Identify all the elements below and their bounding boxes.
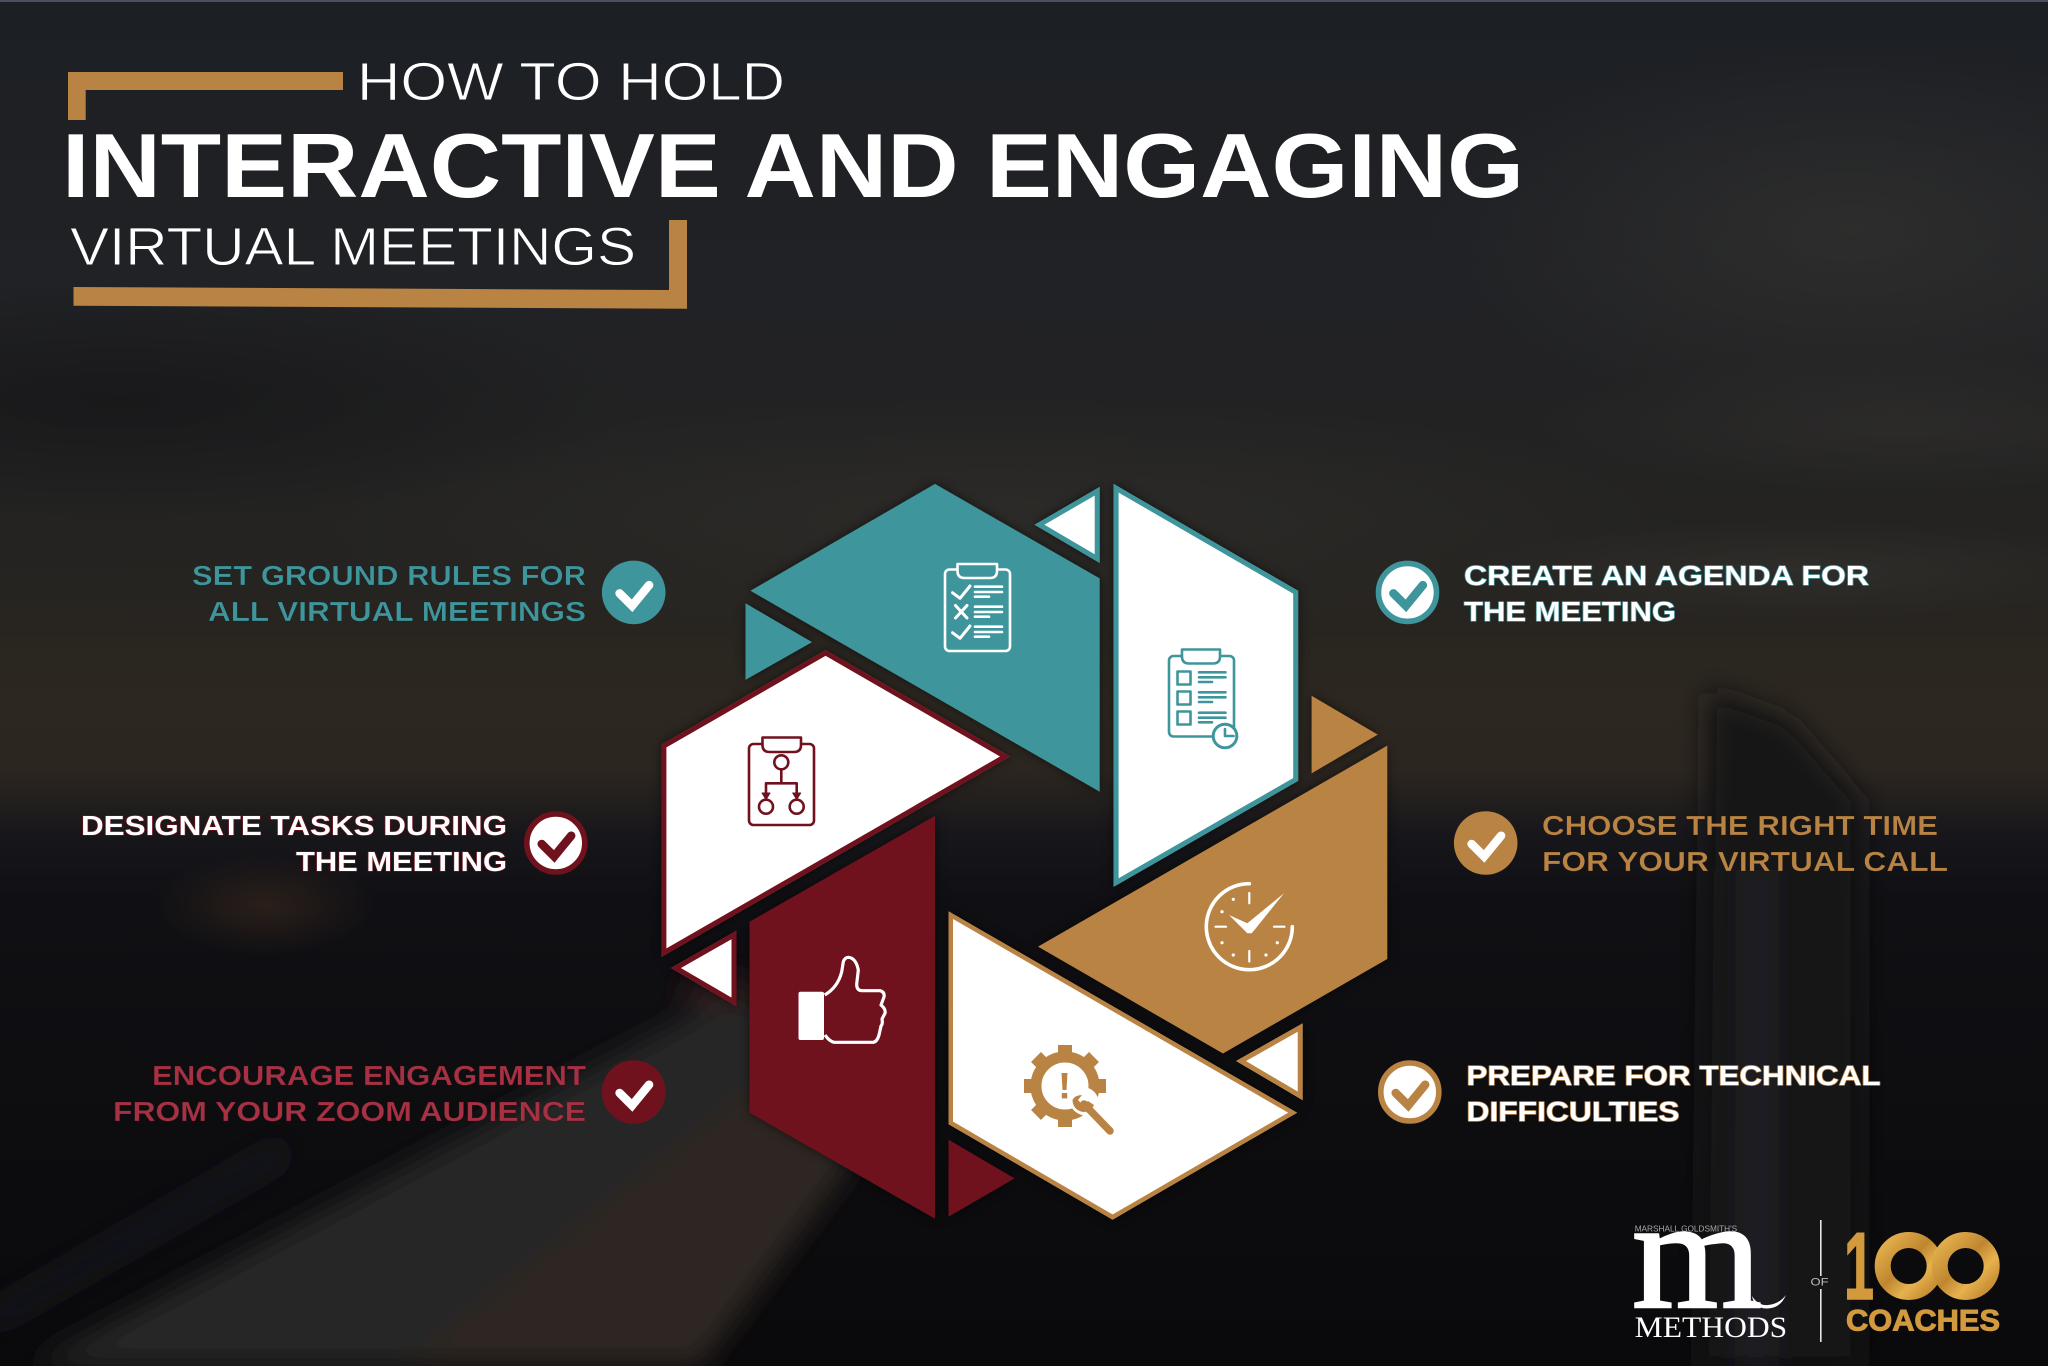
- segment: white create an agenda: [1114, 484, 1298, 887]
- icon: gear and wrench: [1024, 1045, 1110, 1131]
- label text: CREATE AN AGENDA FOR: [1464, 560, 1869, 591]
- check badge: [602, 561, 666, 624]
- label text: DIFFICULTIES: [1466, 1096, 1680, 1127]
- label text: FROM YOUR ZOOM AUDIENCE: [113, 1096, 586, 1127]
- segment: dark red encourage engagement: [671, 816, 1015, 1219]
- label text: THE MEETING: [1464, 596, 1676, 627]
- top edge strip: [0, 0, 2048, 2]
- label text: [81, 810, 507, 877]
- item: choose the right time: [1454, 810, 1948, 877]
- logo: m methods: METHODS: [1635, 1311, 1787, 1344]
- logo: 100 coaches: COACHES: [1846, 1304, 2000, 1338]
- logo divider and of: OF: [1810, 1276, 1829, 1288]
- logo: 100 coaches: 1: [1844, 1213, 1874, 1320]
- item: designate tasks: [81, 810, 585, 877]
- label text: [1466, 1060, 1880, 1127]
- item: set ground rules: [192, 560, 666, 627]
- check badge: [1454, 811, 1517, 875]
- top gold bracket: [68, 72, 343, 120]
- label text: THE MEETING: [296, 846, 507, 877]
- item: encourage engagement: [113, 1060, 666, 1127]
- logo: 100 coaches: [1844, 1213, 2000, 1338]
- icon: checklist clipboard: [945, 564, 1010, 651]
- logo: Marshall Goldsmith's M Methods of 100 Coaches: [1632, 1167, 2000, 1344]
- title block: [62, 52, 1524, 309]
- segment: white prepare for technical difficulties: [948, 911, 1297, 1220]
- logo: m methods: MARSHALL GOLDSMITH'S: [1635, 1224, 1738, 1234]
- item: prepare for technical difficulties: [1381, 1060, 1880, 1127]
- check badge: [527, 814, 585, 872]
- hexagon diagram: [661, 484, 1387, 1220]
- icon: flowchart clipboard: [749, 738, 814, 825]
- icon: clock with check: [1206, 884, 1292, 970]
- label text: [192, 560, 586, 627]
- logo divider and of: [1810, 1220, 1829, 1342]
- title line: virtual meetings: VIRTUAL MEETINGS: [70, 217, 636, 277]
- check badge: [602, 1060, 666, 1124]
- segment: teal set ground rules: [746, 484, 1100, 792]
- label text: FOR YOUR VIRTUAL CALL: [1542, 846, 1948, 877]
- label text: CHOOSE THE RIGHT TIME: [1542, 810, 1938, 841]
- check badge: [1378, 563, 1436, 621]
- icon: agenda clipboard with clock: [1169, 650, 1237, 748]
- label text: ALL VIRTUAL MEETINGS: [208, 596, 586, 627]
- title line: interactive and engaging: INTERACTIVE AND ENGAGING: [62, 116, 1524, 217]
- icon: thumbs up: [798, 957, 885, 1042]
- title line: how to hold: HOW TO HOLD: [357, 52, 785, 112]
- label text: ENCOURAGE ENGAGEMENT: [152, 1060, 586, 1091]
- segment: gold choose the right time: [1038, 696, 1387, 1100]
- segment: white designate tasks: [661, 650, 1010, 957]
- label text: [1464, 560, 1869, 627]
- label text: SET GROUND RULES FOR: [192, 560, 586, 591]
- background: blurred road and tower shapes: [0, 690, 1860, 1366]
- item: create an agenda: [1378, 560, 1869, 627]
- label text: DESIGNATE TASKS DURING: [81, 810, 507, 841]
- label text: [1542, 810, 1948, 877]
- check badge: [1381, 1063, 1439, 1121]
- bottom gold bracket: [74, 220, 687, 309]
- label text: PREPARE FOR TECHNICAL: [1466, 1060, 1880, 1091]
- logo: m methods: m: [1632, 1167, 1762, 1342]
- label text: [113, 1060, 586, 1127]
